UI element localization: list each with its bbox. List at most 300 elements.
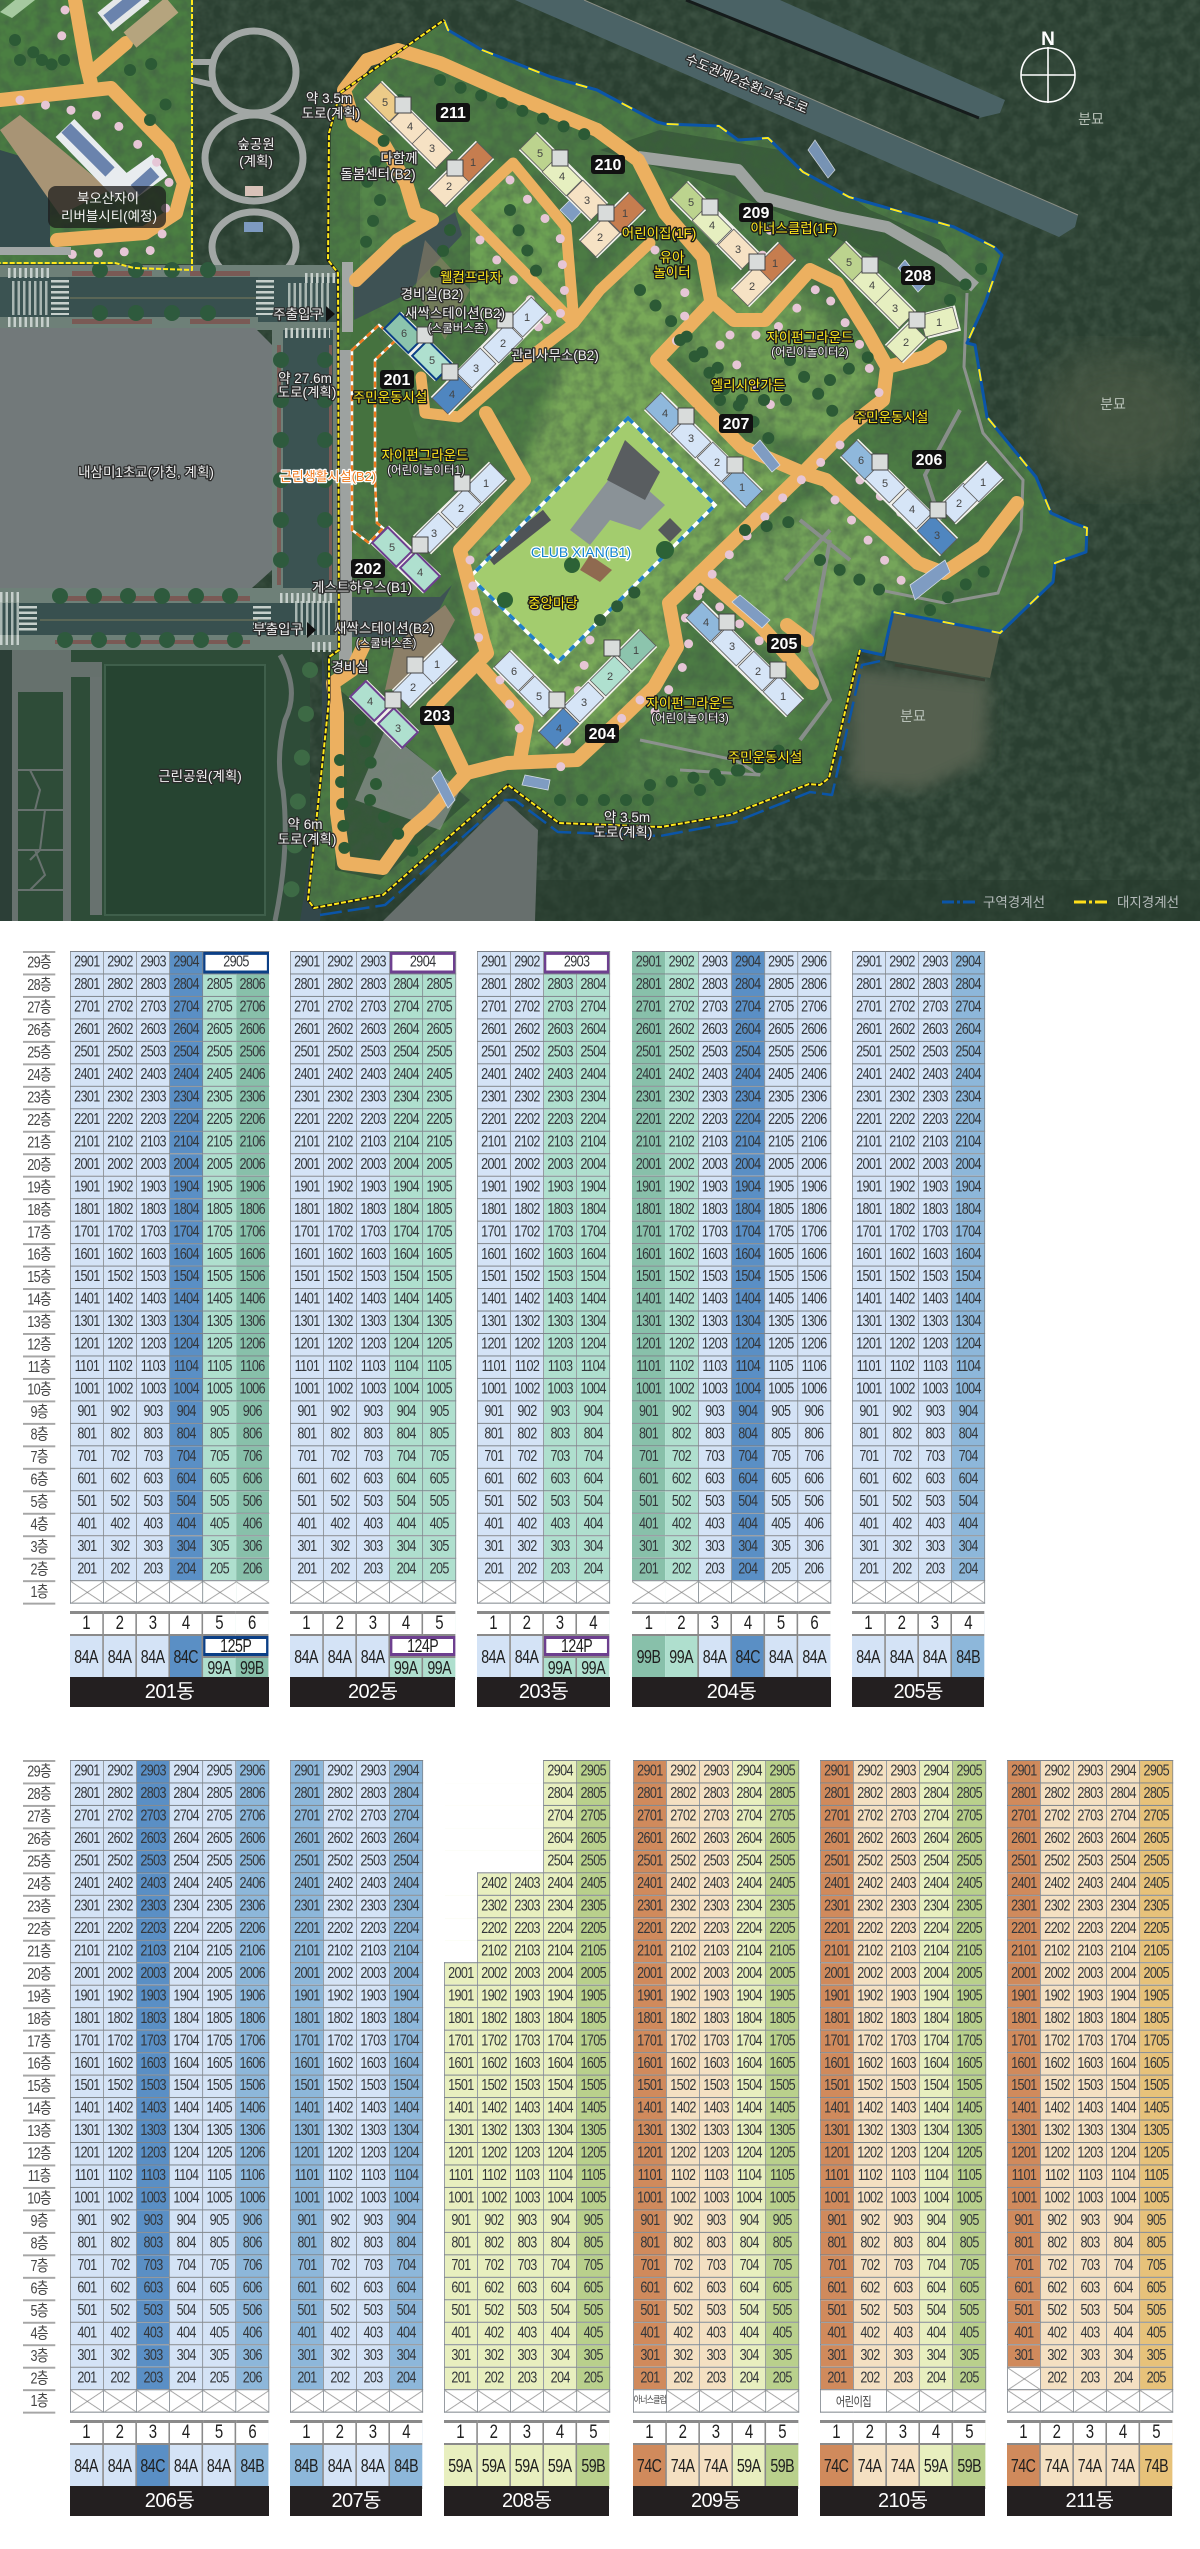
building 203: 3	[395, 723, 401, 735]
unit grid: 502	[484, 2302, 504, 2319]
unit grid: 2402	[481, 1875, 507, 1892]
unit grid: 1203	[1077, 2145, 1103, 2162]
unit grid: 1502	[108, 2078, 133, 2094]
unit grid	[70, 1760, 270, 2413]
unit grid: 701	[485, 1448, 504, 1465]
unit grid: 604	[397, 2280, 416, 2296]
unit grid: 1805	[426, 1201, 452, 1218]
unit grid: 704	[959, 1448, 978, 1465]
unit grid: 2404	[955, 1066, 981, 1083]
unit grid: 2901	[74, 1763, 100, 1780]
floor labels: upper group: 18층	[27, 1202, 51, 1218]
unit grid: 905	[584, 2212, 603, 2229]
unit grid: 1601	[294, 1246, 320, 1263]
unit grid: 2502	[327, 1044, 353, 1060]
grey pond area	[383, 800, 538, 921]
unit grid: 601	[451, 2280, 470, 2296]
unit grid: 2704	[735, 999, 761, 1015]
unit grid: 306	[243, 2347, 262, 2364]
unit grid: 1102	[482, 2167, 506, 2184]
unit grid: 2004	[547, 1965, 573, 1982]
unit grid: 2304	[547, 1898, 573, 1914]
unit grid: 603	[551, 1471, 570, 1487]
unit grid: 2505	[207, 1853, 232, 1869]
unit grid: 2806	[801, 976, 827, 993]
unit grid: 2501	[74, 1044, 100, 1060]
unit grid: 2604	[393, 1830, 419, 1847]
unit grid: 2304	[174, 1089, 199, 1105]
unit grid: 1104	[394, 1358, 418, 1375]
unit grid: 1403	[1077, 2100, 1103, 2117]
unit grid: 1506	[801, 1269, 827, 1285]
unit grid: 2604	[735, 1021, 761, 1038]
unit grid: 1903	[360, 1179, 386, 1195]
white map labels: 근린공원(계획)	[158, 769, 242, 784]
unit grid: 1004	[735, 1381, 761, 1397]
unit grid: 2001	[1011, 1965, 1036, 1982]
unit grid: 405	[210, 1516, 229, 1532]
unit grid: 301	[297, 1538, 316, 1555]
unit grid: 2002	[889, 1156, 915, 1173]
unit grid: 402	[673, 2325, 693, 2341]
unit grid: 1606	[240, 2055, 265, 2072]
unit grid: 505	[772, 1493, 791, 1510]
building 204: 2	[607, 671, 613, 683]
building 206: 3	[934, 530, 940, 542]
facility labels in yellow: 자이펀그라운드	[647, 696, 733, 711]
unit grid: 602	[484, 2280, 504, 2296]
floor labels: upper group: 22층	[27, 1112, 51, 1128]
unit grid: 1704	[174, 2033, 199, 2049]
unit grid: 1505	[769, 2078, 795, 2094]
unit grid: 2101	[294, 1943, 320, 1959]
unit grid: 305	[210, 1538, 229, 1555]
line and unit type table: 3	[523, 2422, 531, 2443]
unit grid: 1005	[207, 2190, 232, 2206]
unit grid: 803	[144, 2235, 163, 2251]
unit grid: 604	[738, 1471, 758, 1487]
facility labels in yellow: 웰컴프라자	[440, 270, 503, 285]
line and unit type table: 124P	[407, 1636, 438, 1656]
unit grid: 1402	[108, 1291, 133, 1308]
unit grid: 403	[707, 2325, 726, 2341]
unit grid: 2605	[426, 1021, 452, 1038]
white map labels: 관리사무소(B2)	[511, 348, 599, 363]
unit grid: 1705	[426, 1224, 452, 1240]
unit grid: 404	[738, 1516, 758, 1532]
unit grid: 1606	[801, 1246, 827, 1263]
unit grid: 1003	[141, 1381, 166, 1397]
unit grid: 2804	[1110, 1785, 1136, 1802]
unit grid: 2004	[581, 1156, 606, 1173]
unit grid: 702	[111, 1448, 130, 1465]
unit grid: 2605	[207, 1021, 232, 1038]
unit grid: 2601	[482, 1021, 507, 1038]
unit grid: 1103	[923, 1358, 947, 1375]
building 201: 2	[500, 338, 506, 350]
unit grid: 701	[859, 1448, 878, 1465]
unit grid: 1701	[74, 2033, 100, 2049]
unit grid: 2302	[327, 1089, 353, 1105]
unit grid: 1204	[174, 2145, 199, 2162]
unit grid: 304	[740, 2347, 759, 2364]
unit grid: 2201	[74, 1920, 100, 1937]
unit grid: 601	[859, 1471, 878, 1487]
floor labels: upper group: 2층	[30, 1561, 48, 1578]
unit grid: 1301	[637, 2122, 663, 2139]
unit grid: 701	[297, 1448, 316, 1465]
facility labels in yellow: 주민운동시설	[728, 750, 802, 765]
unit grid: 1402	[327, 1291, 353, 1308]
unit grid: 901	[485, 1403, 504, 1420]
unit grid: 2304	[393, 1089, 419, 1105]
line and unit type table	[820, 2420, 986, 2489]
unit grid: 2001	[294, 1156, 320, 1173]
unit grid: 2003	[702, 1156, 728, 1173]
building 205	[686, 602, 803, 716]
building name: 211동	[1066, 2490, 1113, 2512]
unit grid: 1102	[669, 1358, 694, 1375]
unit grid: 2505	[426, 1044, 452, 1060]
unit grid: 205	[1146, 2370, 1166, 2386]
unit grid: 1302	[1044, 2122, 1070, 2139]
unit grid: 601	[640, 2280, 659, 2296]
line and unit type table: 2	[336, 1613, 344, 1634]
unit grid: 2004	[735, 1156, 761, 1173]
unit grid: 901	[640, 2212, 659, 2229]
unit grid: 1904	[736, 1988, 762, 2004]
unit grid: 1604	[736, 2055, 762, 2072]
unit grid: 801	[78, 1426, 97, 1442]
unit grid: 804	[738, 1426, 758, 1442]
line and unit type table: 84B	[956, 1646, 980, 1666]
unit grid: 1303	[360, 1313, 386, 1330]
unit grid: 2903	[360, 1763, 386, 1780]
unit grid: 2703	[703, 1808, 729, 1824]
unit grid: 703	[364, 1448, 383, 1465]
unit grid: 1301	[1011, 2122, 1036, 2139]
line and unit type table	[444, 2420, 610, 2489]
floor labels: upper group: 15층	[27, 1269, 51, 1286]
unit grid: 1902	[108, 1179, 133, 1195]
unit grid: 2902	[670, 1763, 696, 1780]
unit grid: 2303	[360, 1089, 386, 1105]
unit grid: 201	[640, 2370, 659, 2386]
unit grid: 1202	[669, 1336, 694, 1353]
unit grid: 1202	[857, 2145, 883, 2162]
building 210	[520, 133, 645, 257]
unit grid: 1003	[514, 2190, 540, 2206]
unit grid: 1301	[294, 2122, 320, 2139]
building 208: 3	[892, 303, 898, 315]
unit grid: 1205	[1143, 2145, 1169, 2162]
unit grid: 2102	[327, 1134, 353, 1150]
unit grid: 1302	[327, 1313, 353, 1330]
unit grid: 803	[518, 2235, 537, 2251]
unit grid: 1704	[581, 1224, 606, 1240]
unit grid: 2503	[141, 1853, 166, 1869]
unit grid: 1101	[295, 1358, 319, 1375]
building 210: 2	[597, 232, 603, 244]
building number tags: 209	[743, 205, 769, 222]
line and unit type table: 74A	[858, 2456, 882, 2476]
unit grid: 801	[639, 1426, 658, 1442]
white map labels: 약 3.5m	[604, 810, 650, 825]
unit grid: 2203	[360, 1111, 386, 1128]
unit grid: 2303	[514, 1898, 540, 1914]
unit grid: 1501	[856, 1269, 882, 1285]
unit grid: 1705	[207, 2033, 232, 2049]
unit grid: 2502	[670, 1853, 696, 1869]
unit grid: 2602	[670, 1830, 696, 1847]
unit grid: 1804	[393, 2010, 419, 2027]
unit grid: 1002	[515, 1381, 540, 1397]
building 204: 1	[633, 645, 639, 657]
unit grid: 606	[243, 1471, 262, 1487]
line and unit type table: 2	[679, 2422, 687, 2443]
unit grid: 603	[705, 1471, 725, 1487]
unit grid: 2001	[482, 1156, 507, 1173]
unit grid: 2505	[769, 1853, 795, 1869]
unit grid: 1903	[890, 1988, 916, 2004]
unit grid: 2001	[824, 1965, 850, 1982]
unit grid: 903	[144, 2212, 163, 2229]
unit grid: 1702	[857, 2033, 883, 2049]
unit grid: 1004	[174, 1381, 199, 1397]
unit grid: 906	[805, 1403, 824, 1420]
unit grid: 2204	[547, 1920, 573, 1937]
unit grid: 403	[705, 1516, 725, 1532]
line and unit type table: 5	[778, 2422, 786, 2443]
unit grid: 602	[1047, 2280, 1066, 2296]
unit grid: 2702	[1044, 1808, 1070, 1824]
floor labels: upper group: 25층	[27, 1044, 51, 1061]
unit grid: 805	[772, 1426, 791, 1442]
unit grid: 1903	[141, 1988, 166, 2004]
unit grid: 1704	[923, 2033, 949, 2049]
unit grid: 2102	[889, 1134, 915, 1150]
line and unit type table: 84B	[394, 2456, 418, 2476]
unit grid: 2804	[393, 1785, 419, 1802]
line and unit type table: 2	[866, 2422, 874, 2443]
unit grid: 1604	[174, 2055, 199, 2072]
line and unit type table: 2	[678, 1613, 685, 1634]
unit grid: 2201	[856, 1111, 882, 1128]
panel: building 209	[633, 1760, 800, 2516]
building name: 201동	[145, 1681, 194, 1703]
unit grid: 2804	[547, 1785, 573, 1802]
building name	[1007, 2486, 1172, 2516]
unit grid: 2504	[581, 1044, 606, 1060]
unit grid: 703	[518, 2257, 537, 2274]
unit grid: 605	[773, 2280, 792, 2296]
floor labels: lower group: 16층	[27, 2056, 51, 2072]
unit grid: 801	[859, 1426, 878, 1442]
unit grid: 501	[639, 1493, 658, 1510]
unit grid: 306	[805, 1538, 824, 1555]
unit grid: 1204	[736, 2145, 762, 2162]
unit grid: 2901	[1011, 1763, 1036, 1780]
floor labels: lower group: 20층	[27, 1966, 51, 1982]
unit grid: 506	[243, 1493, 262, 1510]
unit grid: 1702	[481, 2033, 507, 2049]
unit grid: 2704	[1110, 1808, 1136, 1824]
unit grid: 1501	[448, 2078, 474, 2094]
unit grid: 404	[959, 1516, 978, 1532]
unit grid: 2904	[735, 954, 761, 971]
unit grid: 1805	[1143, 2010, 1169, 2027]
unit grid: 1501	[636, 1269, 662, 1285]
unit grid: 2001	[294, 1965, 320, 1982]
unit grid: 2302	[889, 1089, 915, 1105]
unit grid: 2006	[801, 1156, 827, 1173]
line and unit type table: 1	[302, 2422, 310, 2443]
unit grid: 902	[330, 2212, 350, 2229]
unit grid: 1804	[547, 2010, 573, 2027]
unit grid: 1902	[857, 1988, 883, 2004]
unit grid: 1503	[548, 1269, 573, 1285]
unit grid: 2302	[669, 1089, 694, 1105]
unit grid: 2501	[1011, 1853, 1036, 1869]
unit grid: 1101	[857, 1358, 881, 1375]
line and unit type table: 59A	[482, 2456, 506, 2476]
unit grid: 2604	[547, 1830, 573, 1847]
unit grid: 2704	[923, 1808, 949, 1824]
unit grid: 2002	[669, 1156, 694, 1173]
line and unit type table	[477, 1611, 610, 1678]
unit grid: 2906	[240, 1763, 265, 1780]
unit grid	[820, 1760, 986, 2413]
unit grid: 602	[673, 2280, 693, 2296]
unit grid: 404	[740, 2325, 759, 2341]
unit grid: 1603	[548, 1246, 573, 1263]
unit grid: 1502	[857, 2078, 883, 2094]
unit grid: 1703	[890, 2033, 916, 2049]
unit grid: 1004	[923, 2190, 949, 2206]
unit grid: 1004	[393, 2190, 419, 2206]
line and unit type table: 3	[369, 2422, 377, 2443]
unit grid: 903	[894, 2212, 913, 2229]
floor labels: upper group: 23층	[27, 1089, 51, 1106]
floor labels: upper group: 5층	[30, 1494, 48, 1510]
unit grid: 2201	[637, 1920, 663, 1937]
unit grid: 1905	[1143, 1988, 1169, 2004]
unit grid: 2903	[702, 954, 728, 971]
floor labels: lower group: 22층	[27, 1921, 51, 1937]
unit grid: 2506	[240, 1044, 265, 1060]
facility labels in yellow: 유아	[660, 250, 685, 265]
unit grid: 1003	[703, 2190, 729, 2206]
unit grid: 1603	[514, 2055, 540, 2072]
unit grid: 2805	[207, 976, 232, 993]
floor labels: lower group: 6층	[30, 2280, 48, 2297]
unit grid: 2603	[360, 1021, 386, 1038]
unit grid: 1802	[857, 2010, 883, 2027]
unit grid: 203	[1080, 2370, 1099, 2386]
unit grid: 2205	[1143, 1920, 1169, 1937]
label: 북오산자이 리버블시티: 북오산자이	[77, 191, 139, 206]
unit grid: 401	[639, 1516, 658, 1532]
unit grid: 2402	[108, 1875, 133, 1892]
unit grid: 801	[78, 2235, 97, 2251]
unit grid: 703	[144, 2257, 163, 2274]
unit grid: 2402	[108, 1066, 133, 1083]
unit grid: 1804	[174, 2010, 199, 2027]
unit grid: 2906	[801, 954, 827, 971]
unit grid: 1001	[637, 2190, 663, 2206]
unit grid: 2204	[393, 1920, 419, 1937]
unit grid: 2701	[636, 999, 662, 1015]
unit grid: 501	[297, 1493, 316, 1510]
unit grid: 2805	[580, 1785, 606, 1802]
facility labels in yellow: 중앙마당	[528, 596, 578, 611]
unit grid: 1102	[890, 1358, 914, 1375]
unit grid: 2501	[824, 1853, 850, 1869]
unit grid: 2203	[548, 1111, 573, 1128]
unit grid: 2201	[1011, 1920, 1036, 1937]
unit grid: 1605	[207, 1246, 232, 1263]
unit grid: 403	[1080, 2325, 1099, 2341]
unit grid: 2404	[923, 1875, 949, 1892]
floor labels: upper group: 19층	[27, 1179, 51, 1196]
line and unit type table: 84A	[856, 1646, 880, 1666]
unit grid: 1004	[393, 1381, 419, 1397]
unit grid: 903	[926, 1403, 945, 1420]
line and unit type table: 1	[832, 2422, 840, 2443]
unit grid: 703	[707, 2257, 726, 2274]
line and unit type table: 84A	[328, 1646, 352, 1666]
unit grid: 202	[330, 1561, 350, 1577]
unit grid: 2403	[514, 1875, 540, 1892]
unit grid: 2204	[174, 1111, 199, 1128]
unit grid: 1504	[547, 2078, 573, 2094]
unit grid: 805	[960, 2235, 979, 2251]
unit grid: 1602	[481, 2055, 507, 2072]
unit grid: 601	[297, 2280, 316, 2296]
unit grid: 2103	[702, 1134, 728, 1150]
building number tags: 210	[595, 157, 621, 174]
unit grid: 1303	[1077, 2122, 1103, 2139]
unit grid: 1703	[702, 1224, 728, 1240]
unit grid: 1604	[393, 1246, 419, 1263]
floor labels: upper group: 13층	[27, 1314, 51, 1331]
building name	[820, 2486, 985, 2516]
unit grid: 303	[364, 2347, 383, 2364]
unit grid: 1701	[856, 1224, 882, 1240]
unit grid: 1904	[174, 1179, 199, 1195]
building name	[290, 1677, 455, 1707]
building 203: 1	[434, 659, 440, 671]
unit grid: 1903	[141, 1179, 166, 1195]
unit grid: 1306	[240, 1313, 265, 1330]
unit grid: 1502	[889, 1269, 915, 1285]
unit grid: 2306	[801, 1089, 827, 1105]
unit grid: 1204	[955, 1336, 981, 1353]
unit grid: 403	[144, 1516, 163, 1532]
unit grid: 1802	[327, 2010, 353, 2027]
unit grid: 2401	[482, 1066, 507, 1083]
unit grid: 203	[894, 2370, 913, 2386]
unit grid: 2303	[548, 1089, 573, 1105]
line and unit type table: 2	[336, 2422, 344, 2443]
unit grid: 2103	[1077, 1943, 1103, 1959]
compass: N	[1041, 29, 1055, 50]
unit grid: 501	[78, 1493, 97, 1510]
unit grid: 503	[364, 2302, 383, 2319]
unit grid: 1601	[637, 2055, 663, 2072]
unit grid: 2002	[327, 1965, 353, 1982]
unit grid: 2103	[890, 1943, 916, 1959]
